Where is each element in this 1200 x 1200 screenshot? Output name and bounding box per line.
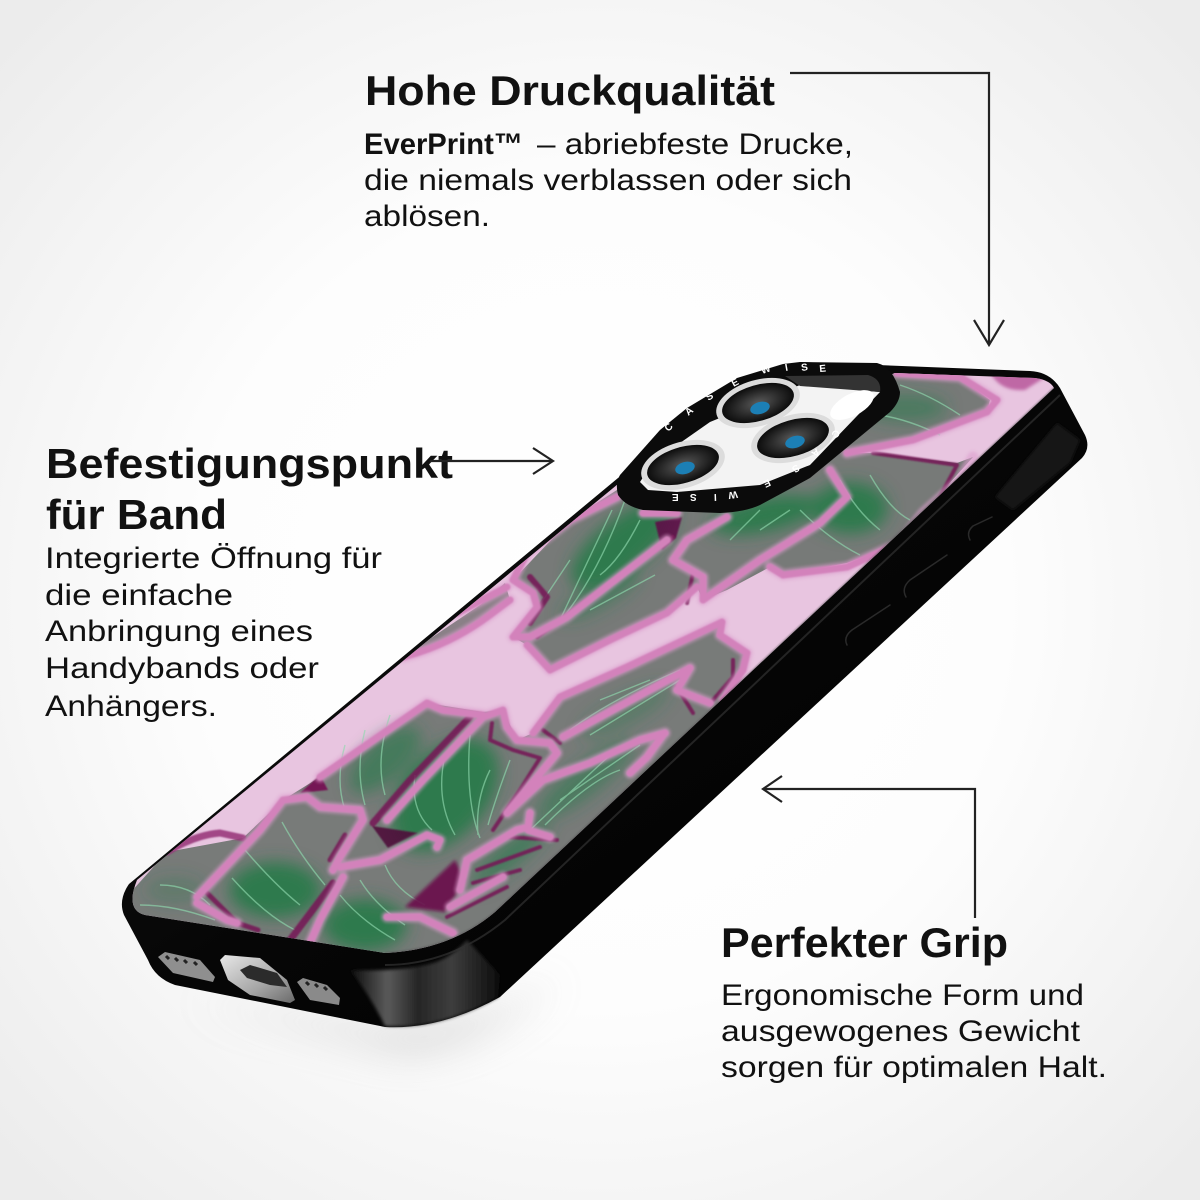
flash highlight bbox=[826, 384, 878, 426]
heading and text: Perfekter Grip: sorgen für optimalen Halt. bbox=[721, 1051, 1107, 1084]
phone case body bbox=[122, 362, 1087, 1027]
bottom right corner gloss bbox=[350, 940, 500, 1026]
phone with patterned case bbox=[122, 362, 1087, 1027]
heading and text: Hohe Druckqualität: Hohe Druckqualität bbox=[365, 67, 775, 114]
camera glass plate bbox=[640, 385, 880, 492]
lens: top bbox=[710, 369, 806, 437]
screen edge shading bbox=[385, 388, 1054, 953]
leaf mass: upper cluster bbox=[513, 372, 990, 670]
arrow: left bbox=[430, 448, 553, 474]
charging port bbox=[220, 955, 295, 1003]
leaf mass: edge sliver bbox=[412, 583, 509, 653]
heading and text: Hohe Druckqualität: ablösen. bbox=[364, 200, 490, 233]
heading and text: Befestigungspunkt: Anbringung eines bbox=[45, 615, 313, 648]
lens: left bbox=[635, 431, 731, 499]
lens: right bbox=[745, 404, 841, 472]
dark leaf wedge bbox=[405, 860, 465, 912]
camera ring bbox=[617, 362, 900, 513]
heading and text: Hohe Druckqualität: EverPrint™ bbox=[364, 128, 523, 161]
camera ring frame bbox=[617, 362, 900, 513]
arrow: bottom bbox=[763, 776, 975, 918]
heading and text: Befestigungspunkt: Integrierte Öffnung für bbox=[45, 542, 382, 575]
heading and text: Perfekter Grip: Perfekter Grip bbox=[721, 919, 1008, 966]
ring brand text: CASEWISE bbox=[672, 427, 842, 502]
leaf veins bbox=[140, 385, 960, 940]
heading and text: Perfekter Grip bbox=[721, 919, 1107, 1084]
heading and text: Befestigungspunkt bbox=[45, 440, 453, 723]
heading and text: Befestigungspunkt: Handybands oder bbox=[45, 652, 319, 685]
side textured grip bump bbox=[995, 423, 1080, 510]
leaf mass: lower cluster bbox=[132, 628, 744, 953]
phone shadow bbox=[190, 960, 600, 1050]
side rim highlight bbox=[385, 395, 1060, 965]
ring brand text: CASEWISE bbox=[663, 362, 827, 434]
heading and text: Befestigungspunkt: die einfache bbox=[45, 579, 233, 612]
ring brand text bbox=[663, 362, 842, 502]
leaf corner top right bbox=[990, 376, 1044, 392]
heading and text: Befestigungspunkt: für Band bbox=[46, 491, 227, 538]
dark leaf folds bbox=[167, 453, 957, 940]
pink printed back bbox=[132, 373, 1054, 953]
heading and text: Perfekter Grip: ausgewogenes Gewicht bbox=[721, 1015, 1081, 1048]
green watercolour washes bbox=[145, 394, 947, 951]
side buttons bbox=[846, 517, 992, 645]
bottom speaker left bbox=[158, 952, 215, 982]
heading and text: Hohe Druckqualität: – abriebfeste Drucke, bbox=[537, 128, 853, 161]
leaf outlines bbox=[197, 373, 997, 943]
heading and text: Befestigungspunkt: Anhängers. bbox=[45, 690, 217, 723]
heading and text: Perfekter Grip: Ergonomische Form und bbox=[721, 979, 1084, 1012]
heading and text: Befestigungspunkt: Befestigungspunkt bbox=[46, 440, 453, 487]
camera glass dark bevel bbox=[785, 375, 880, 392]
leaf outline halo bbox=[197, 373, 997, 943]
leaf artwork bbox=[130, 372, 1054, 970]
arrow: top bbox=[790, 73, 1004, 345]
heading and text: Hohe Druckqualität: die niemals verblassen oder sich bbox=[364, 164, 852, 197]
heading and text: Hohe Druckqualität bbox=[364, 67, 853, 233]
bottom speaker right bbox=[297, 978, 340, 1005]
